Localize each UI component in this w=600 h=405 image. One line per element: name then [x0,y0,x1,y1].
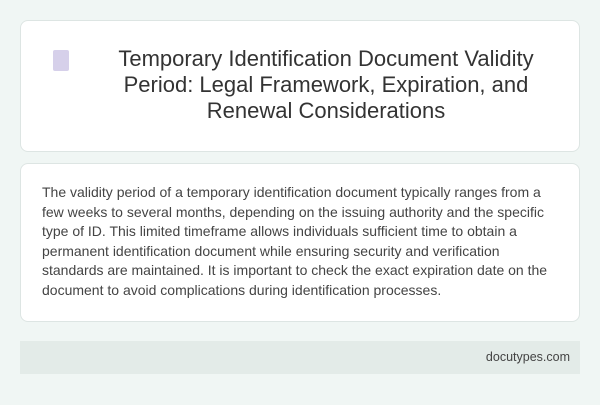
footer text: docutypes.com [486,350,570,364]
text block: The validity period of a temporary identification document typically ranges from a few weeks to several months, depending on the issuing authority and the specific type of ID. This limited timeframe allows individuals sufficient time to obtain a permanent identification document while ensuring security and verification standards are maintained. It is important to check the exact expiration date on the document to avoid complications during identification processes. [42,184,547,298]
title: Temporary Identification Document Validity Period: Legal Framework, Expiration, and Renewal Considerations [118,46,534,123]
panel: title [20,20,580,152]
footer [20,341,580,374]
panel: description [20,163,580,322]
icon: document [53,50,69,71]
